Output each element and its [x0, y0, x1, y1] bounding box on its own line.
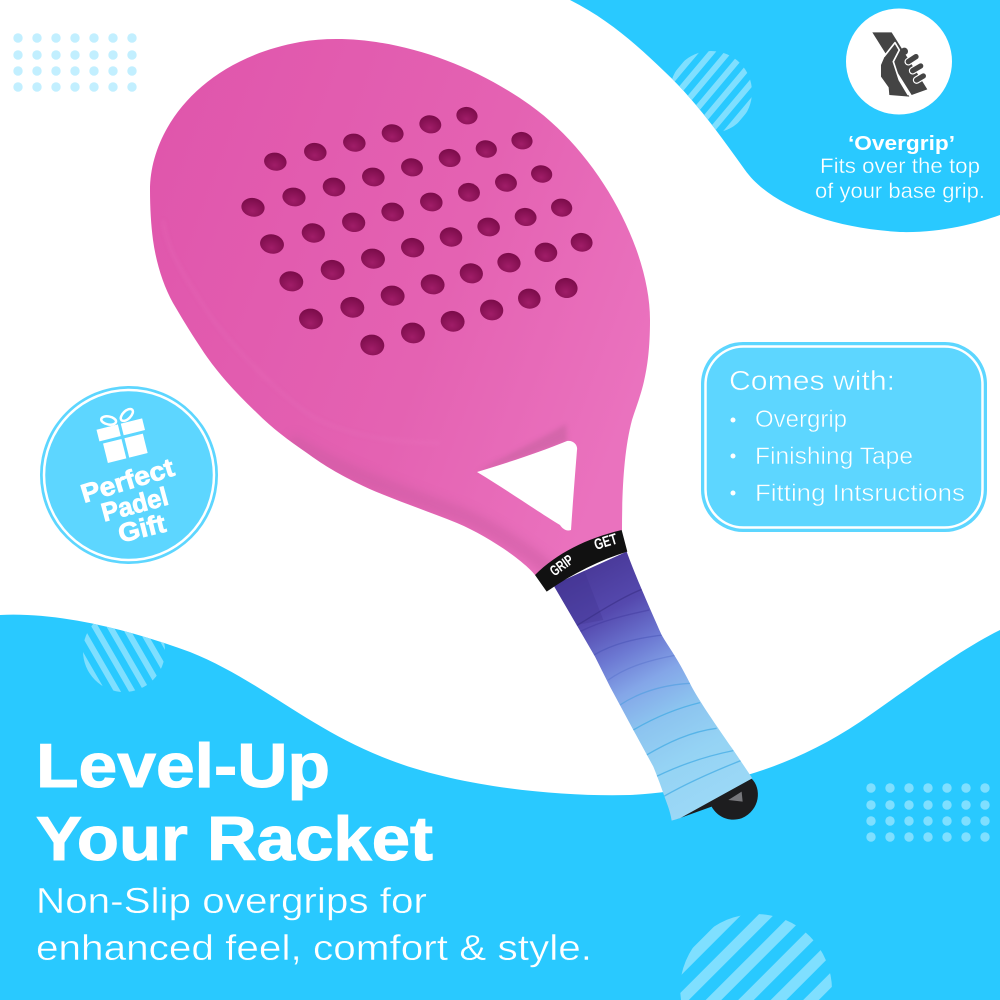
badge text: Padel [98, 481, 171, 528]
overgrip text: ‘Overgrip’ [848, 133, 955, 155]
panel list: Overgrip [755, 406, 847, 433]
overgrip text [815, 133, 985, 203]
panel list: Finishing Tape [755, 443, 913, 470]
badge text: Perfect [77, 452, 178, 509]
background: bottom blue wave [0, 615, 1000, 1000]
panel: comes with [701, 342, 987, 532]
badge: perfect padel gift [40, 386, 218, 564]
handle end cap [677, 779, 758, 820]
dot grid: bottom right [866, 783, 990, 842]
overgrip text: of your base grip. [815, 180, 985, 203]
overgrip text: Fits over the top [820, 155, 980, 178]
badge text [77, 452, 178, 549]
icon: gift box [93, 405, 151, 464]
racket frame and head [150, 39, 650, 575]
panel list: Fitting Intsructions [755, 480, 965, 507]
subtitle [36, 880, 592, 968]
collar tape with brand text [535, 530, 627, 592]
striped circle: top [672, 51, 752, 132]
panel heading: Comes with: [729, 365, 895, 396]
callout: overgrip [815, 8, 985, 203]
subtitle: enhanced feel, comfort & style. [36, 927, 592, 968]
dot grid: top left [13, 33, 137, 92]
racket holes [240, 105, 594, 357]
title: Your Racket [36, 805, 433, 874]
padel racket [150, 39, 763, 827]
title [36, 732, 433, 874]
subtitle: Non-Slip overgrips for [36, 880, 427, 921]
badge text: Gift [115, 508, 169, 549]
striped circle: bottom [680, 914, 832, 1000]
title: Level-Up [36, 732, 330, 801]
handle grip [554, 552, 752, 820]
icon: hand holding grip [872, 32, 927, 97]
panel list [730, 406, 965, 507]
collar tape with brand text: GRIP [547, 552, 577, 580]
striped circle: left [83, 624, 165, 692]
background: top right blue wave [570, 0, 1000, 232]
rim and throat shading [290, 426, 568, 570]
collar tape with brand text: GET [592, 531, 620, 554]
